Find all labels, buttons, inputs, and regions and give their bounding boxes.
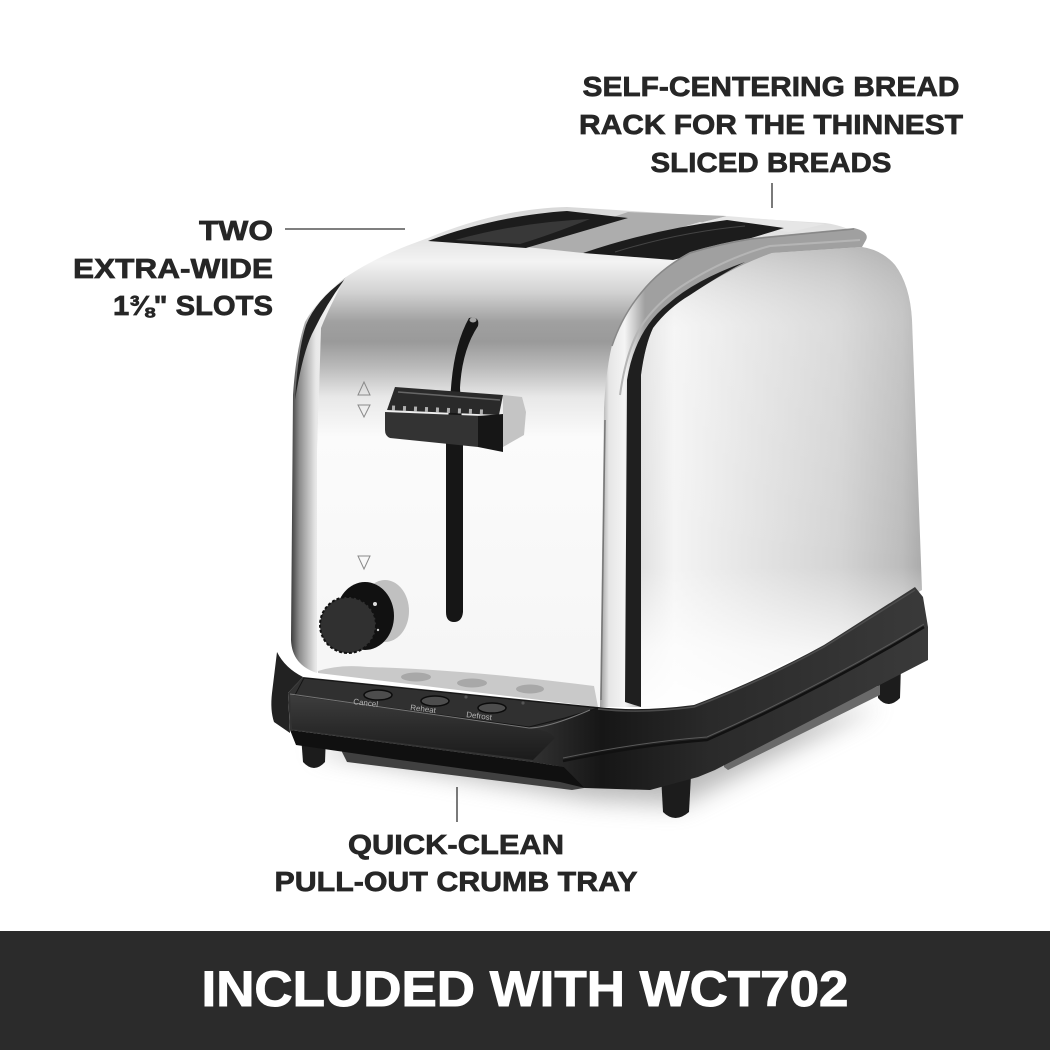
toaster side panel [641,247,922,707]
crumb tray [342,745,600,790]
callout: extra-wide slots: EXTRA-WIDE [73,253,273,284]
left chrome dark reflection [295,280,344,400]
control buttons [353,690,525,722]
callout: bread rack: SELF-CENTERING BREAD [582,71,960,102]
base seams [563,590,924,761]
lever slot [446,318,478,622]
lever handle [385,387,526,452]
callout: bread rack: SLICED BREADS [650,147,892,178]
callout: bread rack: RACK FOR THE THINNEST [579,109,963,140]
chrome edge band [600,228,867,707]
base left rim [271,652,303,733]
lever slot tip highlight [470,318,476,322]
toaster front face [317,207,864,707]
lower panel reflection [318,666,598,707]
callout: extra-wide slots [73,215,405,321]
left body chrome band [291,277,346,673]
browning dial [320,580,409,653]
control buttons: Cancel [353,697,379,709]
toaster illustration [271,207,928,818]
footer banner: INCLUDED WITH WCT702 [202,961,848,1017]
callout: bread rack [579,71,963,208]
control panel [290,678,598,760]
toaster feet [301,665,901,818]
front reflections of buttons [401,672,544,694]
top surface between slots [526,212,727,253]
callout: crumb tray [274,787,638,897]
callout: crumb tray: QUICK-CLEAN [348,829,564,860]
control buttons: Reheat [410,703,437,715]
ground shadow [310,705,880,805]
base underside [290,730,585,788]
up and down arrows [358,382,370,569]
control buttons: Defrost [466,710,493,722]
dark reflection stripe [625,262,745,707]
callout: crumb tray: PULL-OUT CRUMB TRAY [274,866,638,897]
callout: extra-wide slots: 1⅜" SLOTS [113,290,273,321]
toaster base [288,587,928,790]
callout: extra-wide slots: TWO [199,215,273,246]
bread slots [428,211,784,260]
footer banner [0,931,1050,1050]
